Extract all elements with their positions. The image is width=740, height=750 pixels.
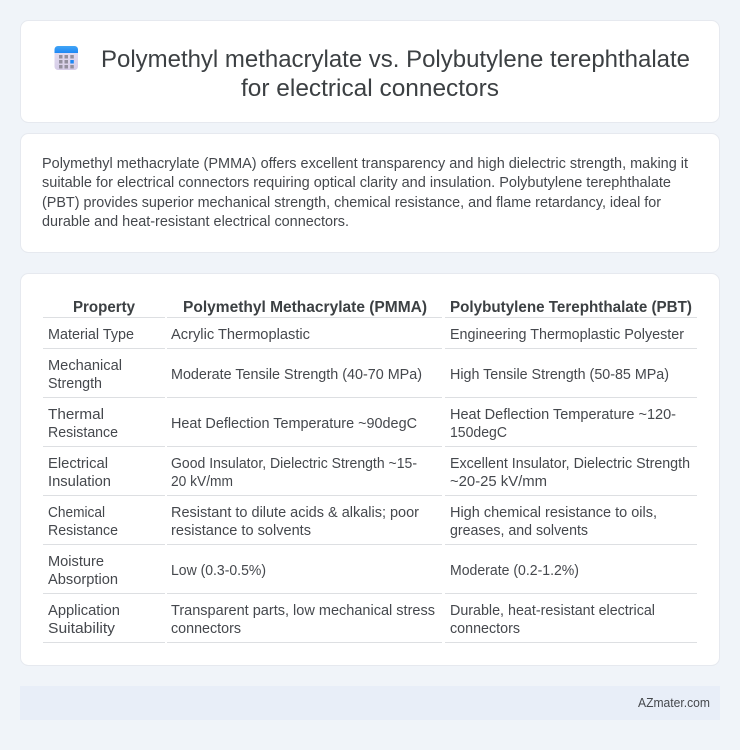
row: chemical resistance: greases, and solvents [450, 523, 588, 539]
row: mechanical strength: Strength [48, 376, 102, 392]
title: Polymethyl methacrylate vs. Polybutylene terephthalate [101, 46, 690, 73]
row: thermal resistance: Heat Deflection Temperature ~120- [450, 407, 676, 423]
icon: calendar [54, 46, 78, 70]
row: chemical resistance: High chemical resistance to oils, [450, 505, 657, 521]
panel: comparison table card [20, 274, 720, 666]
row: thermal resistance: 150degC [450, 425, 507, 441]
table header row: Polybutylene Terephthalate (PBT) [450, 299, 692, 316]
table header row: Property [73, 299, 135, 316]
row: application suitability: Durable, heat-resistant electrical [450, 603, 655, 619]
footer [20, 686, 720, 720]
row: chemical resistance: Chemical [48, 505, 105, 521]
row: electrical insulation: Good Insulator, Dielectric Strength ~15- [171, 456, 417, 472]
row: mechanical strength [48, 358, 669, 392]
title [101, 46, 690, 102]
row: thermal resistance: Heat Deflection Temperature ~90degC [171, 416, 417, 432]
table header row: Polymethyl Methacrylate (PMMA) [183, 299, 427, 316]
row: chemical resistance: Resistance [48, 523, 118, 539]
text block: summary: (PBT) provides superior mechanical strength, chemical resistance, and flame retardancy, ideal for [42, 195, 661, 211]
panel: summary card [20, 134, 720, 252]
table header row [73, 299, 692, 316]
row: chemical resistance: resistance to solvents [171, 523, 311, 539]
row: mechanical strength: Mechanical [48, 358, 122, 374]
row: mechanical strength: Moderate Tensile Strength (40-70 MPa) [171, 367, 422, 383]
text block: summary: Polymethyl methacrylate (PMMA) offers excellent transparency and high dielectric strength, making it [42, 156, 688, 172]
row: application suitability: connectors [450, 621, 520, 637]
row: moisture absorption: Absorption [48, 572, 118, 588]
footer: AZmater.com [638, 696, 710, 710]
text block: summary: suitable for electrical connectors requiring optical clarity and insulation. Polybutylene terephthalate [42, 175, 671, 191]
text block: summary: durable and heat-resistant electrical connectors. [42, 214, 349, 230]
title: for electrical connectors [241, 75, 499, 102]
row: mechanical strength: High Tensile Strength (50-85 MPa) [450, 367, 669, 383]
row: chemical resistance: Resistant to dilute acids & alkalis; poor [171, 505, 419, 521]
row: electrical insulation: 20 kV/mm [171, 474, 233, 490]
row: moisture absorption [48, 554, 579, 588]
row: material type: Acrylic Thermoplastic [171, 327, 310, 343]
row: material type [48, 327, 684, 343]
row: electrical insulation [48, 456, 690, 490]
row: application suitability: Suitability [48, 621, 116, 637]
row: moisture absorption: Moisture [48, 554, 104, 570]
row: thermal resistance [48, 407, 676, 441]
row: thermal resistance: Resistance [48, 425, 118, 441]
row: electrical insulation: Excellent Insulator, Dielectric Strength [450, 456, 690, 472]
row: chemical resistance [48, 505, 657, 539]
row: electrical insulation: Insulation [48, 474, 111, 490]
row: moisture absorption: Low (0.3-0.5%) [171, 563, 266, 579]
row: electrical insulation: Electrical [48, 456, 108, 472]
row: application suitability: connectors [171, 621, 241, 637]
row: material type: Engineering Thermoplastic Polyester [450, 327, 684, 343]
row: application suitability: Application [48, 603, 120, 619]
text block: summary [42, 156, 688, 230]
row: material type: Material Type [48, 327, 134, 343]
row: application suitability [48, 603, 655, 637]
row: electrical insulation: ~20-25 kV/mm [450, 474, 547, 490]
row: application suitability: Transparent parts, low mechanical stress [171, 603, 435, 619]
row: moisture absorption: Moderate (0.2-1.2%) [450, 563, 579, 579]
panel: title card [20, 20, 720, 122]
row: thermal resistance: Thermal [48, 407, 104, 423]
